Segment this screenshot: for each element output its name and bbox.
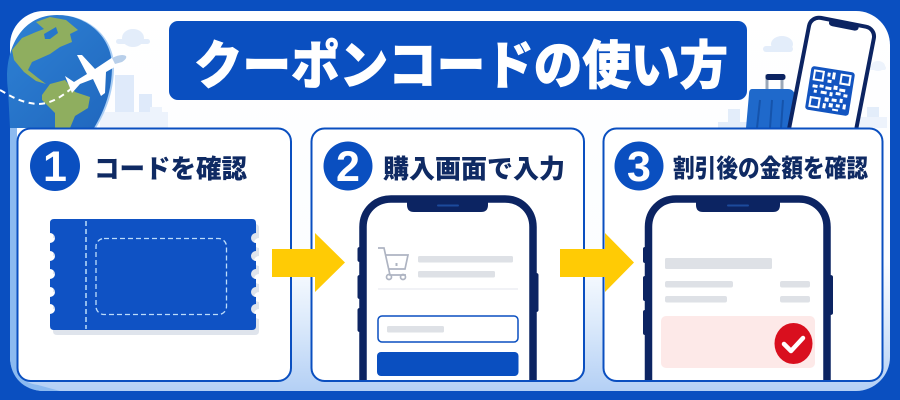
- heading: step 1: コードを確認: [94, 154, 247, 184]
- price placeholder lines: [665, 258, 810, 302]
- number badge 1: [30, 141, 80, 191]
- number badge 2: [324, 142, 372, 191]
- phone: checkout screen: [358, 199, 538, 380]
- flight path: [0, 87, 73, 104]
- heading: step 3: 割引後の金額を確認: [673, 154, 868, 183]
- submit button: [377, 352, 518, 376]
- phone: discounted total screen: [643, 199, 833, 380]
- arrow: step 2 to step 3: [560, 233, 634, 292]
- icon: shopping cart: [378, 248, 408, 280]
- icon: phone with QR code: [783, 16, 876, 171]
- discounted total box: [661, 316, 815, 368]
- QR code: [805, 66, 855, 116]
- icon: globe: [7, 15, 114, 128]
- arrow: step 1 to step 2: [272, 233, 345, 292]
- panel: step 3: [604, 128, 882, 381]
- title banner: [169, 21, 747, 100]
- placeholder lines: [418, 256, 513, 278]
- icon: red check mark: [774, 323, 812, 364]
- decoration: clouds and city skyline left: [100, 29, 168, 128]
- coupon input field: [378, 316, 518, 342]
- icon: airplane: [65, 55, 126, 96]
- icon: suitcase: [746, 74, 795, 128]
- number badge 2: 2: [336, 143, 360, 191]
- number badge 3: [614, 142, 664, 191]
- number badge 1: 1: [43, 143, 67, 191]
- title banner: クーポンコードの使い方: [194, 38, 728, 96]
- panel: step 2: [312, 128, 584, 381]
- heading: step 2: 購入画面で入力: [383, 154, 565, 184]
- number badge 3: 3: [627, 143, 651, 191]
- icon: coupon ticket: [50, 219, 259, 335]
- panel: step 1: [18, 128, 291, 381]
- decoration: clouds and city skyline right: [718, 36, 887, 128]
